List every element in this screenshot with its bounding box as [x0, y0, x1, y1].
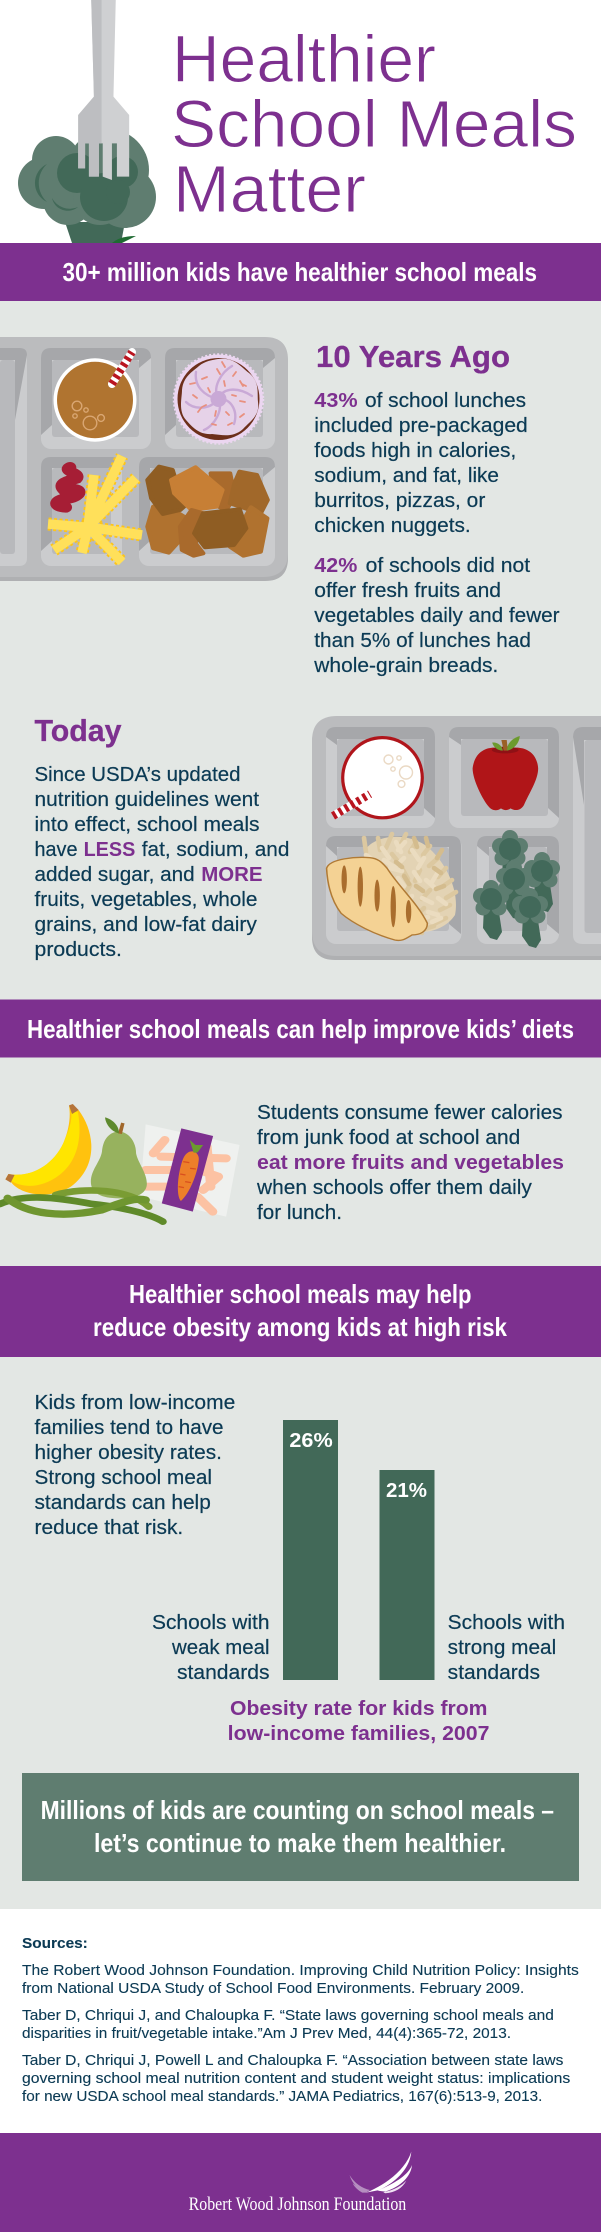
banner: 30+ million kids	[0, 243, 601, 301]
label: strong meal standards: standards	[448, 1661, 540, 1684]
source 1: The Robert Wood Johnson Foundation. Improving Child Nutrition Policy: Insights	[22, 1962, 579, 1979]
source 3: for new USDA school meal standards.” JAMA Pediatrics, 167(6):513-9, 2013.	[22, 2088, 542, 2105]
text: junk food and fruit consumption: eat more fruits and vegetables	[257, 1151, 564, 1174]
label: weak meal standards: Schools with	[152, 1611, 270, 1634]
callout: continue to make meals healthier: let’s continue to make them healthier.	[94, 1828, 506, 1858]
icon: wing logo	[350, 2152, 412, 2193]
icon: rice	[364, 834, 456, 933]
label: strong meal standards	[448, 1611, 565, 1684]
title: School Meals	[171, 87, 577, 162]
icon: apple	[473, 736, 538, 810]
heading: 10 Years Ago: 10 Years Ago	[316, 339, 510, 374]
text: low-income obesity risk: Kids from low-income	[34, 1391, 235, 1414]
source 3	[22, 2052, 570, 2105]
paragraph: 42 percent: 42%	[314, 554, 357, 577]
text: junk food and fruit consumption: when schools offer them daily	[256, 1176, 533, 1199]
source 2: Taber D, Chriqui J, and Chaloupka F. “State laws governing school meals and	[22, 2007, 554, 2024]
sources heading: Sources:	[22, 1935, 88, 1952]
paragraph: updated guidelines: Since USDA’s updated	[34, 763, 240, 786]
paragraph: updated guidelines: added sugar, and	[34, 863, 195, 886]
tray compartments	[326, 727, 601, 944]
paragraph: 43 percent: of school lunches	[365, 389, 526, 412]
source 1	[22, 1962, 579, 1997]
icon: crinkle fries	[48, 456, 142, 562]
icon: grilled chicken	[327, 857, 427, 940]
paragraph: 43 percent: included pre-packaged	[314, 414, 528, 437]
label: weak meal standards: standards	[177, 1661, 270, 1684]
title	[171, 22, 577, 227]
text: low-income obesity risk	[34, 1391, 235, 1539]
paragraph: 43 percent: sodium, and fat, like	[314, 464, 499, 487]
bar: strong standards 21%	[380, 1470, 434, 1680]
paragraph: 43 percent: 43%	[314, 389, 358, 412]
bar: weak standards 26%: 26%	[289, 1430, 333, 1452]
chart caption: low-income families, 2007	[228, 1722, 489, 1745]
icon: pear	[91, 1117, 147, 1198]
source 2	[22, 2007, 554, 2042]
paragraph: 42 percent	[313, 554, 560, 677]
bar: strong standards 21%: 21%	[386, 1480, 427, 1502]
paragraph: updated guidelines	[34, 763, 289, 961]
icon: soda cup	[54, 352, 136, 442]
text: junk food and fruit consumption: for lunch.	[257, 1201, 342, 1224]
paragraph: 42 percent: of schools did not	[366, 554, 530, 577]
icon: milk cup	[333, 736, 424, 819]
banner: improve kids' diets	[0, 1000, 601, 1058]
section text: Today	[34, 713, 289, 961]
text: junk food and fruit consumption	[256, 1101, 564, 1224]
text: low-income obesity risk: reduce that risk.	[34, 1516, 183, 1539]
text: junk food and fruit consumption: Students consume fewer calories	[257, 1101, 562, 1124]
paragraph: 42 percent: offer fresh fruits and	[314, 579, 501, 602]
footer: foundation logo: Robert Wood Johnson Foundation	[189, 2194, 407, 2215]
chart caption: Obesity rate for kids from	[230, 1697, 488, 1720]
icon: broccoli florets	[473, 830, 560, 948]
icon: green beans	[0, 1190, 163, 1222]
section text: 10 Years Ago	[313, 339, 560, 677]
text: low-income obesity risk: families tend to have	[34, 1416, 224, 1439]
label: strong meal standards: Schools with	[448, 1611, 565, 1634]
illustration: unhealthy lunch tray	[0, 337, 288, 581]
icon: ketchup	[56, 467, 79, 507]
footer: foundation logo	[0, 2133, 601, 2232]
tray compartments	[0, 348, 275, 566]
paragraph: 43 percent: burritos, pizzas, or	[314, 489, 485, 512]
paragraph: 43 percent	[314, 389, 528, 537]
source 1: from National USDA Study of School Food Environments. February 2009.	[22, 1980, 524, 1997]
paragraph: updated guidelines: products.	[34, 938, 122, 961]
paragraph: updated guidelines: grains, and low-fat dairy	[34, 913, 258, 936]
illustration: healthy lunch tray	[312, 716, 601, 960]
icon: chicken nuggets	[148, 467, 268, 556]
heading: Today: Today	[34, 713, 122, 748]
paragraph: updated guidelines: into effect, school meals	[34, 813, 260, 836]
label: weak meal standards	[152, 1611, 270, 1684]
illustration: fruit and vegetables	[0, 1104, 240, 1222]
bar chart: obesity rate	[152, 1420, 565, 1745]
text: junk food and fruit consumption: from junk food at school and	[257, 1126, 520, 1149]
paragraph: updated guidelines: fruits, vegetables, whole	[34, 888, 258, 911]
banner: reduce obesity: reduce obesity among kids at high risk	[93, 1312, 507, 1342]
banner: reduce obesity: Healthier school meals may help	[129, 1279, 472, 1309]
paragraph: updated guidelines: LESS	[84, 838, 135, 861]
text: low-income obesity risk: Strong school meal	[34, 1466, 212, 1489]
paragraph: 42 percent: than 5% of lunches had	[314, 629, 531, 652]
bar: weak standards 26%	[283, 1420, 338, 1680]
page background panel	[0, 301, 601, 1909]
callout: continue to make meals healthier	[22, 1773, 579, 1881]
paragraph: updated guidelines: nutrition guidelines went	[34, 788, 259, 811]
icon: broccoli on a fork	[18, 0, 156, 243]
icon: banana	[5, 1104, 91, 1195]
banner: 30+ million kids: 30+ million kids have healthier school meals	[62, 257, 537, 287]
title: Healthier	[172, 22, 436, 97]
source 3: governing school meal nutrition content and student weight status: implications	[22, 2070, 570, 2087]
label: weak meal standards: weak meal	[171, 1636, 270, 1659]
chart caption	[228, 1697, 489, 1745]
icon: carrot snack bag	[140, 1124, 240, 1217]
paragraph: 42 percent: vegetables daily and fewer	[314, 604, 560, 627]
banner: reduce obesity	[0, 1266, 601, 1357]
paragraph: 43 percent: foods high in calories,	[314, 439, 516, 462]
title: Matter	[173, 152, 366, 227]
paragraph: updated guidelines: fat, sodium, and	[142, 838, 289, 861]
icon: frosted cupcake	[174, 354, 263, 444]
label: strong meal standards: strong meal	[448, 1636, 556, 1659]
paragraph: 42 percent: whole-grain breads.	[313, 654, 498, 677]
paragraph: 43 percent: chicken nuggets.	[314, 514, 471, 537]
paragraph: updated guidelines: have	[34, 838, 78, 861]
paragraph: updated guidelines: MORE	[201, 863, 263, 886]
source 3: Taber D, Chriqui J, Powell L and Chaloupka F. “Association between state laws	[22, 2052, 563, 2069]
source 2: disparities in fruit/vegetable intake.”Am J Prev Med, 44(4):365-72, 2013.	[22, 2025, 511, 2042]
text: low-income obesity risk: higher obesity rates.	[34, 1441, 222, 1464]
panel: sources	[22, 1935, 579, 2105]
text: low-income obesity risk: standards can help	[34, 1491, 211, 1514]
